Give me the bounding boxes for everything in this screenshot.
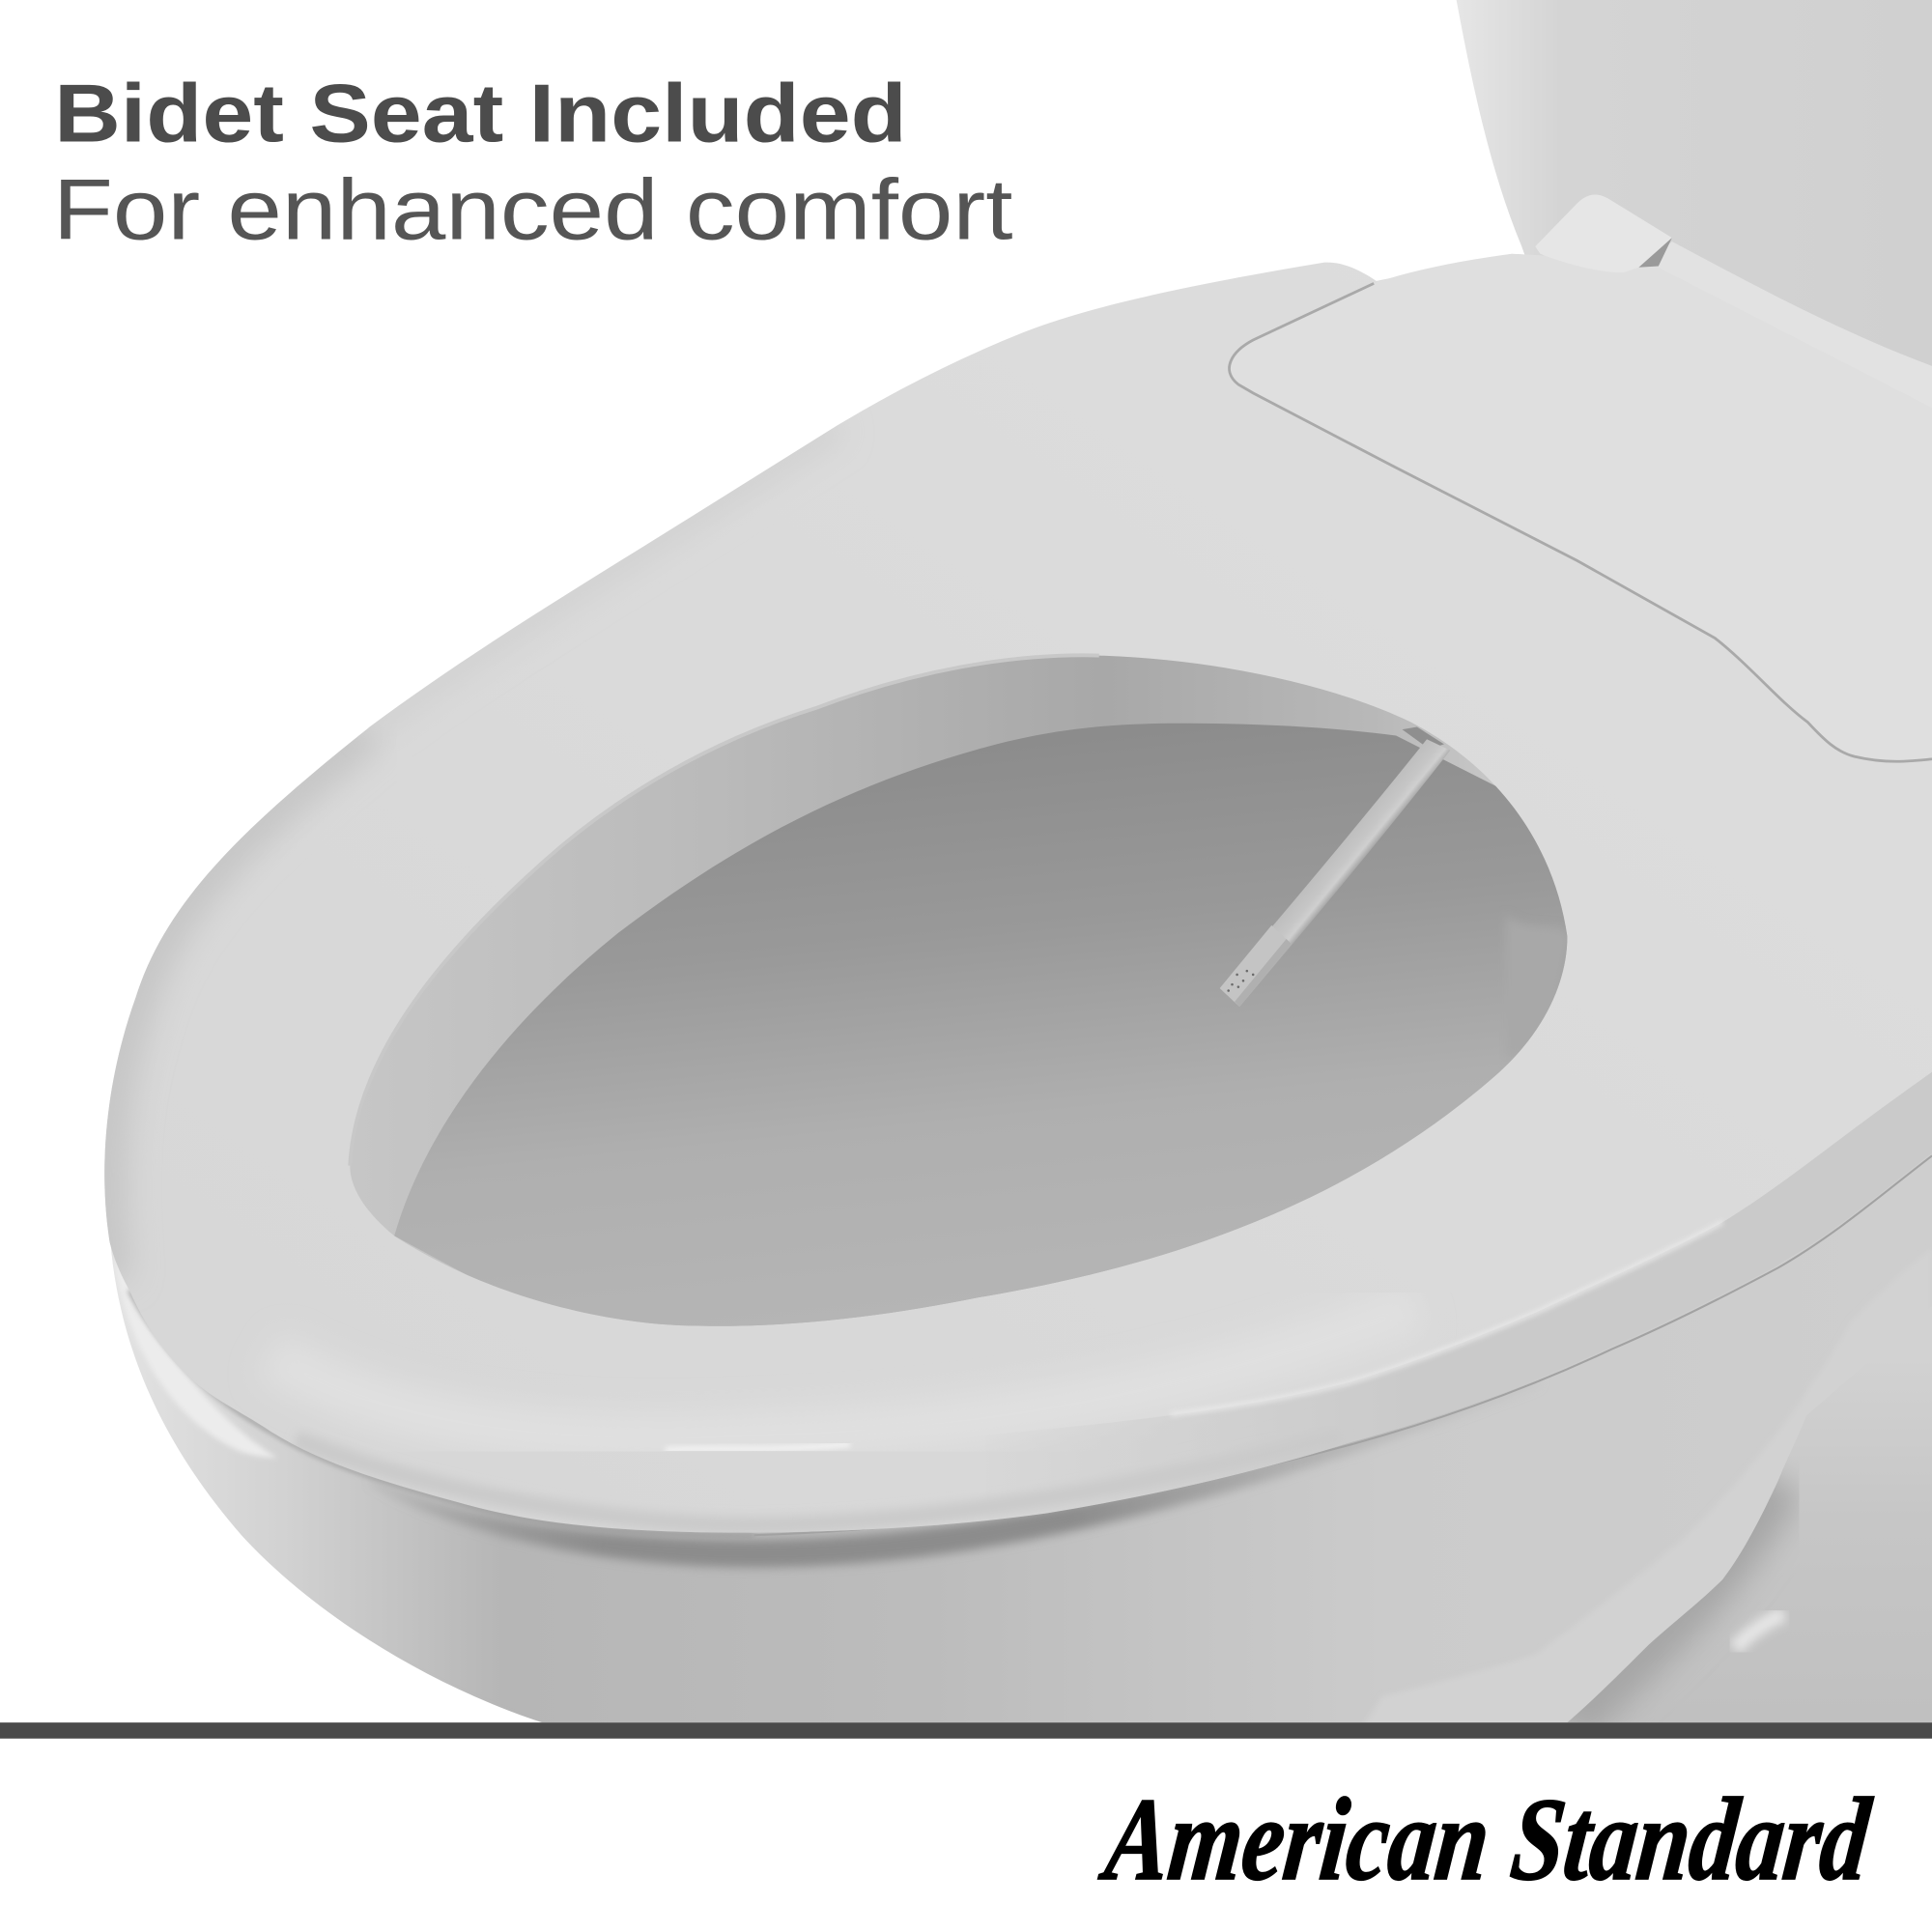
pedestal base bbox=[1567, 1457, 1932, 1722]
bowl trapway band bbox=[1355, 1248, 1932, 1737]
toilet bowl bbox=[110, 1153, 1932, 1722]
inner bowl right wall bbox=[1511, 925, 1553, 1049]
wand nozzle tip bbox=[1220, 925, 1292, 1007]
seat side band bbox=[1192, 1072, 1932, 1463]
seat ridge highlight bbox=[1171, 1222, 1722, 1414]
front rim light bbox=[288, 1365, 858, 1438]
seat shadow on bowl bbox=[391, 1409, 1459, 1572]
lid lower lip bbox=[1646, 242, 1932, 419]
top cover plate bbox=[1230, 254, 1932, 761]
tank lid bbox=[1457, 0, 1932, 412]
heading line 1: Bidet Seat Included bbox=[54, 69, 907, 160]
inner bowl bbox=[394, 724, 1602, 1355]
bowl rim lip bbox=[119, 1273, 272, 1459]
bowl left highlight bbox=[74, 1454, 518, 1749]
footer divider bar bbox=[0, 1722, 1932, 1739]
seat outer edge shading bbox=[104, 727, 370, 1282]
hinge bbox=[1535, 194, 1672, 272]
heading bbox=[53, 69, 1013, 257]
cover plate groove bbox=[1230, 283, 1932, 761]
seat front highlight bbox=[666, 1444, 850, 1450]
seat gap line bbox=[129, 1290, 754, 1535]
seat bbox=[74, 234, 1932, 1552]
bowl opening bbox=[345, 647, 1602, 1355]
bowl opening rim bbox=[350, 655, 1099, 1166]
heading line 2: For enhanced comfort bbox=[53, 160, 1013, 257]
bidet wand bbox=[1220, 727, 1450, 1007]
